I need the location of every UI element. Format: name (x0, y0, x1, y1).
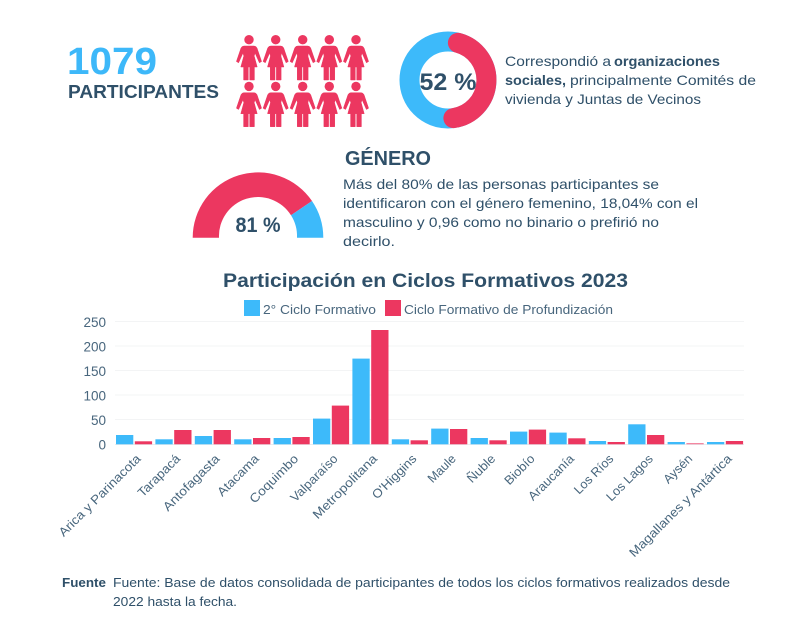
bar chart: participation by region (56, 315, 744, 560)
text block: gender description (343, 176, 698, 249)
text block: social organizations: principalmente Comités de (570, 72, 756, 88)
text block: social organizations (505, 53, 756, 107)
icon grid: women pictograms (236, 35, 369, 127)
y axis labels: 0 (98, 438, 106, 452)
donut chart: 52 % (410, 42, 486, 118)
text block: social organizations: sociales, (505, 72, 566, 88)
participants label: PARTICIPANTES (68, 82, 219, 102)
gauge chart: 81 % (193, 172, 323, 238)
gauge chart: 81 %: 81 % (236, 214, 281, 237)
x axis labels: Metropolitana (310, 452, 380, 522)
x axis labels: Arica y Parinacota (56, 452, 144, 539)
heading: gender: GÉNERO (345, 147, 431, 170)
blue bars: 2° Ciclo Formativo (116, 359, 724, 444)
text block: social organizations: Correspondió a (505, 53, 611, 69)
source footnote: Fuente: Base de datos consolidada de participantes de todos los ciclos formativos realizados desde (113, 575, 730, 590)
text block: social organizations: vivienda y Juntas de Vecinos (505, 91, 701, 107)
x axis labels: Biobío (502, 452, 538, 488)
x axis labels: Maule (425, 452, 459, 486)
x axis labels: Tarapacá (135, 452, 183, 500)
x axis labels: Antofagasta (160, 452, 222, 514)
x axis labels: O'Higgins (369, 452, 419, 502)
y axis labels: 50 (91, 413, 106, 428)
y axis labels: 100 (83, 388, 106, 404)
legend (244, 300, 613, 317)
y axis labels (83, 315, 106, 452)
donut chart: 52 %: 52 % (420, 69, 476, 96)
red bars: Ciclo Formativo de Profundización (135, 330, 743, 444)
source footnote: Fuente (62, 575, 106, 590)
text block: gender description: Más del 80% de las personas participantes se (343, 176, 659, 192)
source footnote (62, 575, 730, 609)
x axis labels: Valparaíso (288, 452, 341, 505)
x axis labels: Los Lagos (603, 452, 656, 504)
legend: 2° Ciclo Formativo (263, 302, 376, 317)
x axis labels: Magallanes y Antártica (626, 452, 735, 560)
text block: social organizations: organizaciones (614, 53, 720, 69)
y axis labels: 150 (83, 364, 106, 379)
text block: gender description: decirlo. (343, 233, 395, 249)
x axis labels: Los Ríos (571, 452, 616, 497)
stat: participants (67, 41, 219, 102)
legend: Ciclo Formativo de Profundización (404, 302, 613, 317)
y axis labels: 200 (83, 340, 106, 354)
source footnote: 2022 hasta la fecha. (113, 594, 237, 609)
chart title: Participación en Ciclos Formativos 2023 (223, 271, 628, 292)
x axis labels: Araucanía (525, 452, 577, 503)
x axis labels: Ñuble (464, 452, 498, 486)
text block: gender description: masculino y 0,96 como no binario o prefirió no (343, 214, 659, 230)
text block: gender description: identificaron con el género femenino, 18,04% con el (343, 195, 698, 211)
x axis labels (56, 452, 735, 560)
y axis labels: 250 (83, 315, 106, 330)
x axis labels: Atacama (214, 452, 262, 499)
x axis labels: Aysén (661, 452, 695, 486)
x axis labels: Coquimbo (247, 452, 301, 506)
participant count: 1079 (67, 41, 157, 83)
